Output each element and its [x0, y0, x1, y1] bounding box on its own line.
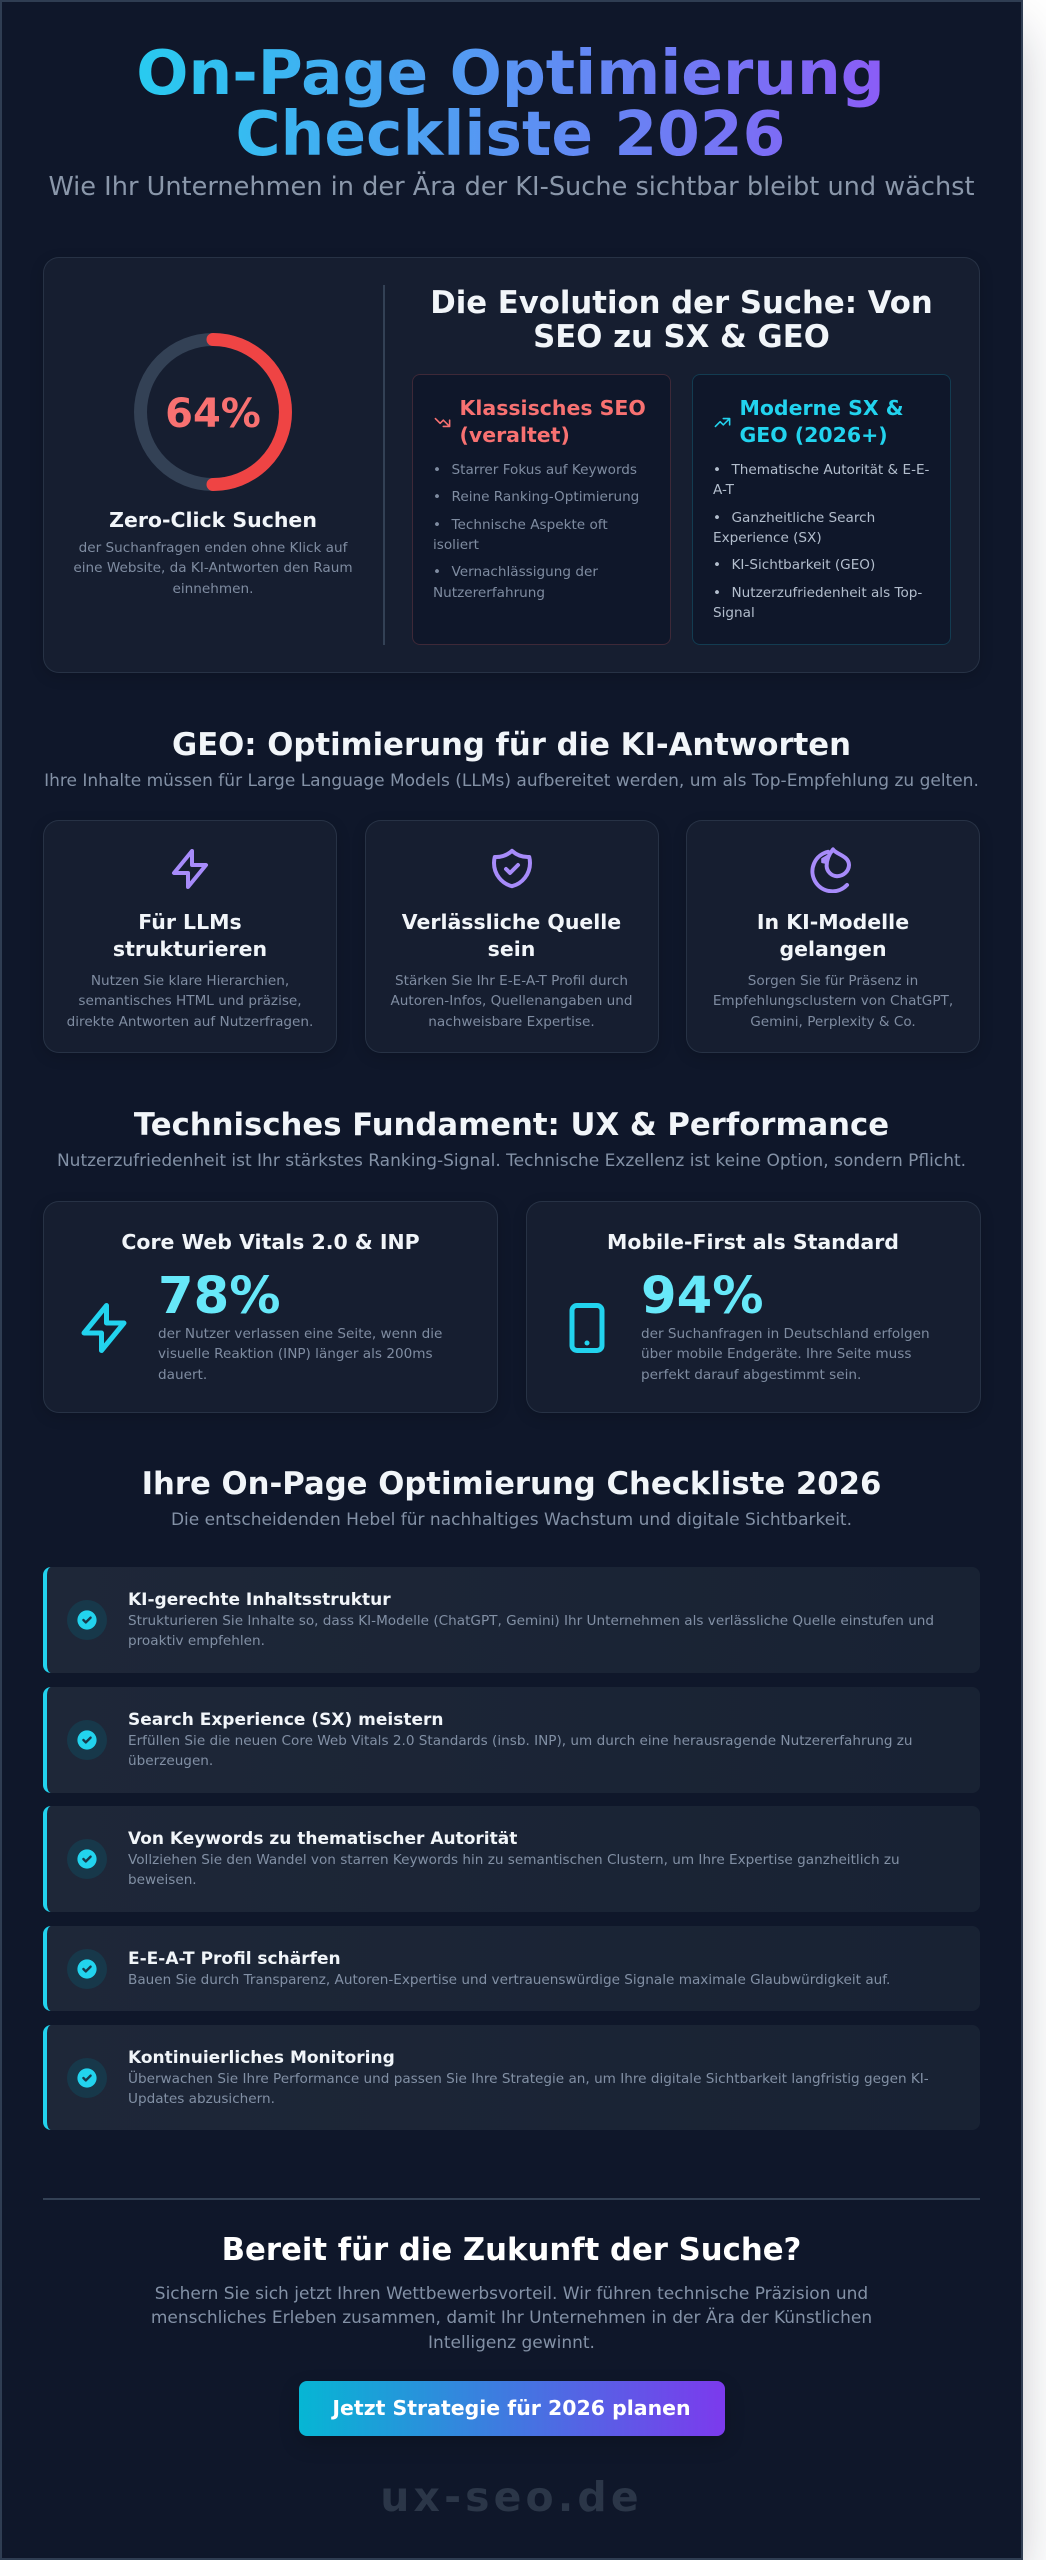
modern list: • — [713, 557, 721, 573]
icon: check — [67, 1600, 107, 1640]
stat heading: Zero-Click Suchen — [109, 508, 317, 532]
item text — [128, 2070, 929, 2107]
stat description: über mobile Endgeräte. Ihre Seite muss — [641, 1346, 911, 1362]
icon: check — [67, 1720, 107, 1760]
stat description — [641, 1326, 930, 1383]
card heading: strukturieren — [113, 937, 267, 961]
footer logo text: ux-seo.de — [380, 2473, 643, 2521]
modern list: A-T — [713, 482, 734, 498]
evolution heading: Die Evolution der Suche: Von — [430, 285, 933, 321]
icon: trending down — [434, 418, 450, 428]
classic SEO list: Reine Ranking-Optimierung — [452, 489, 639, 505]
subheading: technical foundation: Nutzerzufriedenheit ist Ihr stärkstes Ranking-Signal. Technische Exzellenz ist keine Option, sondern Pflicht. — [57, 1151, 966, 1171]
icon: flame swirl — [810, 847, 851, 893]
item title: KI-gerechte Inhaltsstruktur — [128, 1590, 391, 1610]
call to action heading: Bereit für die Zukunft der Suche? — [222, 2232, 801, 2268]
stat description: einnehmen. — [173, 581, 253, 597]
stat description: perfekt darauf abgestimmt sein. — [641, 1367, 861, 1383]
stat description — [158, 1326, 442, 1383]
modern list: Signal — [713, 605, 755, 621]
classic SEO list: isoliert — [433, 537, 479, 553]
evolution heading: SEO zu SX & GEO — [533, 319, 830, 355]
item title: Kontinuierliches Monitoring — [128, 2048, 395, 2068]
modern list: Experience (SX) — [713, 530, 822, 546]
item text: Bauen Sie durch Transparenz, Autoren-Expertise und vertrauenswürdige Signale maximale Glaubwürdigkeit auf. — [128, 1972, 890, 1988]
classic SEO list: Vernachlässigung der — [452, 564, 598, 580]
subtitle: Wie Ihr Unternehmen in der Ära der KI-Suche sichtbar bleibt und wächst — [48, 172, 975, 202]
title — [136, 43, 885, 166]
item text: Überwachen Sie Ihre Performance und passen Sie Ihre Strategie an, um Ihre digitale Sichtbarkeit langfristig gegen KI- — [128, 2070, 929, 2086]
item title: Von Keywords zu thematischer Autorität — [128, 1829, 517, 1849]
donut chart: 64%: 64% — [165, 391, 261, 437]
stat description: der Suchanfragen in Deutschland erfolgen — [641, 1326, 930, 1342]
card heading: In KI-Modelle — [757, 910, 909, 934]
icon: lightning bolt — [82, 1303, 126, 1353]
card text: Autoren-Infos, Quellenangaben und — [390, 993, 633, 1009]
modern list: • — [713, 585, 721, 601]
card text — [713, 973, 953, 1030]
card text: Empfehlungsclustern von ChatGPT, — [713, 993, 953, 1009]
card: classic SEO — [412, 374, 671, 645]
modern list: Ganzheitliche Search — [732, 510, 875, 526]
icon: check — [67, 2058, 107, 2098]
stat description: eine Website, da KI-Antworten den Raum — [73, 560, 353, 576]
card text: Nutzen Sie klare Hierarchien, — [91, 973, 289, 989]
modern list: KI-Sichtbarkeit (GEO) — [732, 557, 875, 573]
card text: semantisches HTML und präzise, — [78, 993, 302, 1009]
item text: beweisen. — [128, 1872, 197, 1888]
panel: core web vitals — [43, 1201, 498, 1413]
classic SEO list: Starrer Fokus auf Keywords — [452, 462, 637, 478]
stat description: der Nutzer verlassen eine Seite, wenn die — [158, 1326, 442, 1342]
call to action text: menschliches Erleben zusammen, damit Ihr Unternehmen in der Ära der Künstlichen — [151, 2308, 872, 2328]
item text: Vollziehen Sie den Wandel von starren Keywords hin zu semantischen Clustern, um Ihre Expertise ganzheitlich zu — [128, 1852, 900, 1868]
modern list: Nutzerzufriedenheit als Top- — [732, 585, 922, 601]
item text: Updates abzusichern. — [128, 2091, 275, 2107]
card heading: Verlässliche Quelle — [402, 910, 621, 934]
stat: 94%: 94% — [641, 1266, 764, 1326]
card text — [390, 973, 633, 1030]
card heading: sein — [488, 937, 535, 961]
stat: 78%: 78% — [158, 1266, 281, 1326]
stat description — [73, 540, 353, 597]
card: modern SX and GEO — [692, 374, 951, 645]
evolution heading — [430, 285, 933, 355]
classic SEO list — [433, 462, 639, 601]
donut chart: 64% — [134, 333, 292, 491]
classic SEO list: • — [433, 462, 441, 478]
panel: evolution of search — [43, 257, 980, 673]
call to action text: Intelligenz gewinnt. — [428, 2333, 595, 2353]
subheading: GEO: Ihre Inhalte müssen für Large Language Models (LLMs) aufbereitet werden, um als Top-Empfehlung zu gelten. — [44, 771, 979, 791]
modern list: Thematische Autorität & E-E- — [732, 462, 929, 478]
item title: E-E-A-T Profil schärfen — [128, 1948, 341, 1968]
classic SEO heading: (veraltet) — [460, 423, 570, 447]
item text: Strukturieren Sie Inhalte so, dass KI-Modelle (ChatGPT, Gemini) Ihr Unternehmen als verlässliche Quelle einstufen und — [128, 1613, 934, 1629]
card heading: Mobile-First als Standard — [607, 1230, 899, 1254]
classic SEO list: Nutzererfahrung — [433, 585, 545, 601]
panel: reliable source — [364, 820, 658, 1053]
icon: lightning bolt — [172, 849, 208, 889]
item title: Search Experience (SX) meistern — [128, 1710, 444, 1730]
heading: GEO: GEO: Optimierung für die KI-Antworten — [172, 727, 851, 763]
item text — [128, 1852, 900, 1888]
card heading — [402, 910, 621, 961]
classic SEO heading — [460, 396, 646, 447]
call to action button — [298, 2381, 724, 2436]
call to action text — [151, 2284, 872, 2353]
icon: shield check — [492, 848, 532, 888]
call to action button: Jetzt Strategie für 2026 planen — [332, 2396, 691, 2420]
title: On-Page Optimierung — [136, 38, 885, 109]
modern list: • — [713, 510, 721, 526]
modern list: • — [713, 462, 721, 478]
checklist item 2 — [43, 1687, 980, 1792]
checklist item 4 — [43, 1926, 980, 2011]
item text — [128, 1733, 913, 1769]
checklist item 5 — [43, 2024, 980, 2130]
modern list — [713, 462, 929, 621]
classic SEO heading: Klassisches SEO — [460, 396, 646, 420]
icon: smartphone — [570, 1303, 604, 1353]
heading: checklist: Ihre On-Page Optimierung Checkliste 2026 — [142, 1466, 881, 1502]
stat description: visuelle Reaktion (INP) länger als 200ms — [158, 1346, 433, 1362]
classic SEO list: • — [433, 489, 441, 505]
icon: check — [67, 1839, 107, 1879]
icon: trending up — [714, 418, 730, 428]
card text — [67, 973, 313, 1030]
checklist item 3 — [43, 1806, 980, 1912]
classic SEO list: • — [433, 517, 441, 533]
card heading: Für LLMs — [138, 910, 242, 934]
modern heading: GEO (2026+) — [740, 423, 888, 447]
card text: direkte Antworten auf Nutzerfragen. — [67, 1014, 313, 1030]
stat description: der Suchanfragen enden ohne Klick auf — [79, 540, 347, 556]
call to action text: Sichern Sie sich jetzt Ihren Wettbewerbsvorteil. Wir führen technische Präzision und — [155, 2284, 868, 2304]
classic SEO list: Technische Aspekte oft — [452, 517, 608, 533]
card text: Stärken Sie Ihr E-E-A-T Profil durch — [395, 973, 628, 989]
item text: proaktiv empfehlen. — [128, 1633, 265, 1649]
item text: überzeugen. — [128, 1753, 213, 1769]
card heading — [757, 910, 909, 961]
modern heading — [740, 396, 904, 447]
panel: into AI models — [686, 820, 980, 1053]
checklist item 1 — [43, 1567, 980, 1672]
modern heading: Moderne SX & — [740, 396, 904, 420]
heading: technical foundation: Technisches Fundament: UX & Performance — [134, 1107, 889, 1143]
icon: check — [67, 1948, 107, 1988]
panel: mobile first — [526, 1201, 980, 1413]
card heading — [113, 910, 267, 961]
card heading: gelangen — [779, 937, 887, 961]
panel: structure for LLMs — [43, 820, 337, 1053]
subheading: checklist: Die entscheidenden Hebel für nachhaltiges Wachstum und digitale Sichtbarkeit. — [171, 1510, 852, 1530]
title: Checkliste 2026 — [236, 99, 785, 170]
card heading: Core Web Vitals 2.0 & INP — [121, 1230, 420, 1254]
stat description: dauert. — [158, 1367, 207, 1383]
item text: Erfüllen Sie die neuen Core Web Vitals 2.0 Standards (insb. INP), um durch eine herausragende Nutzererfahrung zu — [128, 1733, 913, 1749]
card text: Gemini, Perplexity & Co. — [750, 1014, 916, 1030]
card text: Sorgen Sie für Präsenz in — [748, 973, 918, 989]
item text — [128, 1613, 934, 1649]
classic SEO list: • — [433, 564, 441, 580]
card text: nachweisbare Expertise. — [428, 1014, 595, 1030]
